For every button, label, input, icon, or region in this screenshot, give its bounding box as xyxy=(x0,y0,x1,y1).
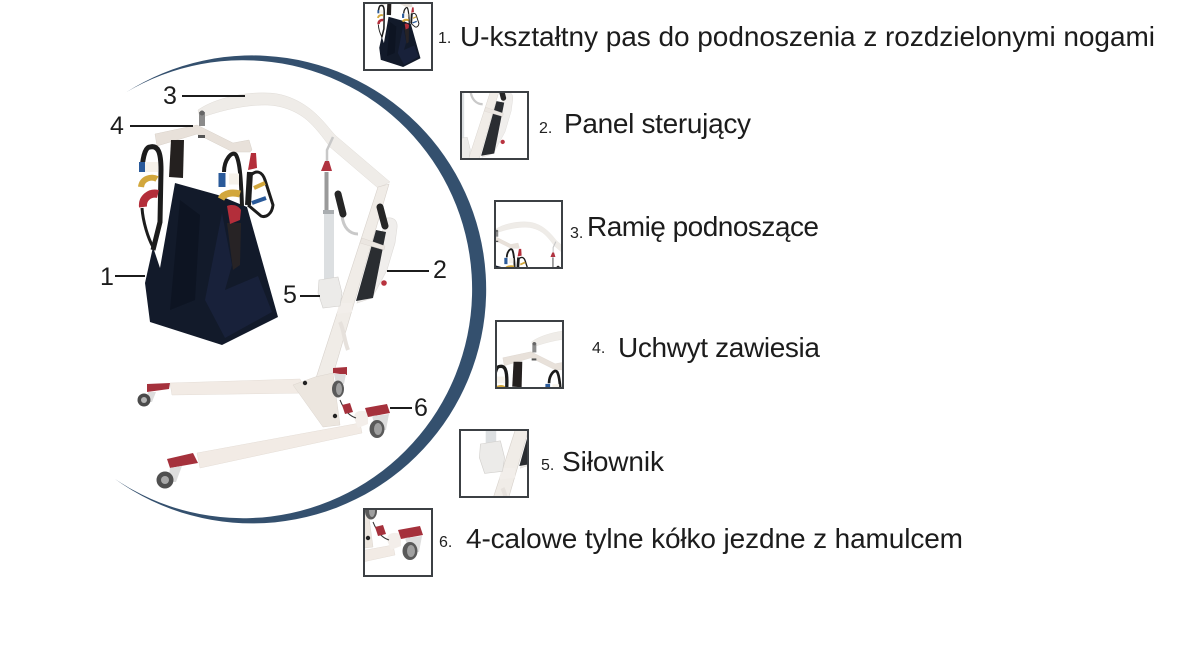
callout 1 on lift: 1 xyxy=(100,263,114,291)
callout 3 on lift xyxy=(163,82,245,110)
navy crescent ring xyxy=(115,55,486,523)
legend item 2: Panel sterujący xyxy=(564,108,751,139)
legend item 5: Siłownik xyxy=(562,446,665,477)
dark fold under right strap xyxy=(227,223,241,270)
legend item 2: 2. xyxy=(539,120,552,137)
actuator xyxy=(318,137,342,308)
callout 4 on lift xyxy=(110,112,193,140)
callout 5 on lift xyxy=(283,281,320,309)
thumbnail 2: control panel xyxy=(313,0,528,300)
spreader bar and hook xyxy=(155,110,252,152)
thumbnail 5: actuator xyxy=(290,248,562,663)
far right strap loop xyxy=(248,172,273,217)
sling xyxy=(141,140,278,345)
callout 2 on lift xyxy=(387,256,447,284)
legend item 4: 4. xyxy=(592,340,605,357)
legend item 6: 4-calowe tylne kółko jezdne z hamulcem xyxy=(466,523,963,554)
control panel xyxy=(356,207,397,303)
callout 6 on lift xyxy=(390,394,428,422)
left strap loop xyxy=(141,147,161,250)
legend item 5: 5. xyxy=(541,457,554,474)
legend item 3: 3. xyxy=(570,225,583,242)
centre strap xyxy=(169,140,184,178)
mast and base frame xyxy=(170,184,389,468)
legend item 4: Uchwyt zawiesia xyxy=(618,332,820,363)
legend item 6: 6. xyxy=(439,534,452,551)
thumbnail 3: lifting arm xyxy=(468,201,585,400)
thumbnail 4: sling hanger xyxy=(491,321,665,595)
callout 1 on lift xyxy=(100,263,145,291)
legend item 1: 1. xyxy=(438,30,451,47)
castor wheels xyxy=(138,374,389,488)
thumbnail 1: sling xyxy=(364,0,457,111)
callout 5 on lift: 5 xyxy=(283,281,297,309)
callout 2 on lift: 2 xyxy=(433,256,447,284)
callout 6 on lift: 6 xyxy=(414,394,428,422)
sling body xyxy=(145,183,278,345)
red pedals xyxy=(147,367,390,468)
callout 4 on lift: 4 xyxy=(110,112,124,140)
legend item 1: U-kształtny pas do podnoszenia z rozdzielonymi nogami xyxy=(460,21,1155,52)
right strap loop xyxy=(221,154,242,224)
thumbnail 6: rear castor xyxy=(170,215,432,610)
patient lift illustration xyxy=(138,93,397,488)
legend item 3: Ramię podnoszące xyxy=(587,211,819,242)
lifting arm xyxy=(198,93,390,188)
handle xyxy=(338,194,358,234)
red tag xyxy=(248,153,257,170)
callout 3 on lift: 3 xyxy=(163,82,177,110)
